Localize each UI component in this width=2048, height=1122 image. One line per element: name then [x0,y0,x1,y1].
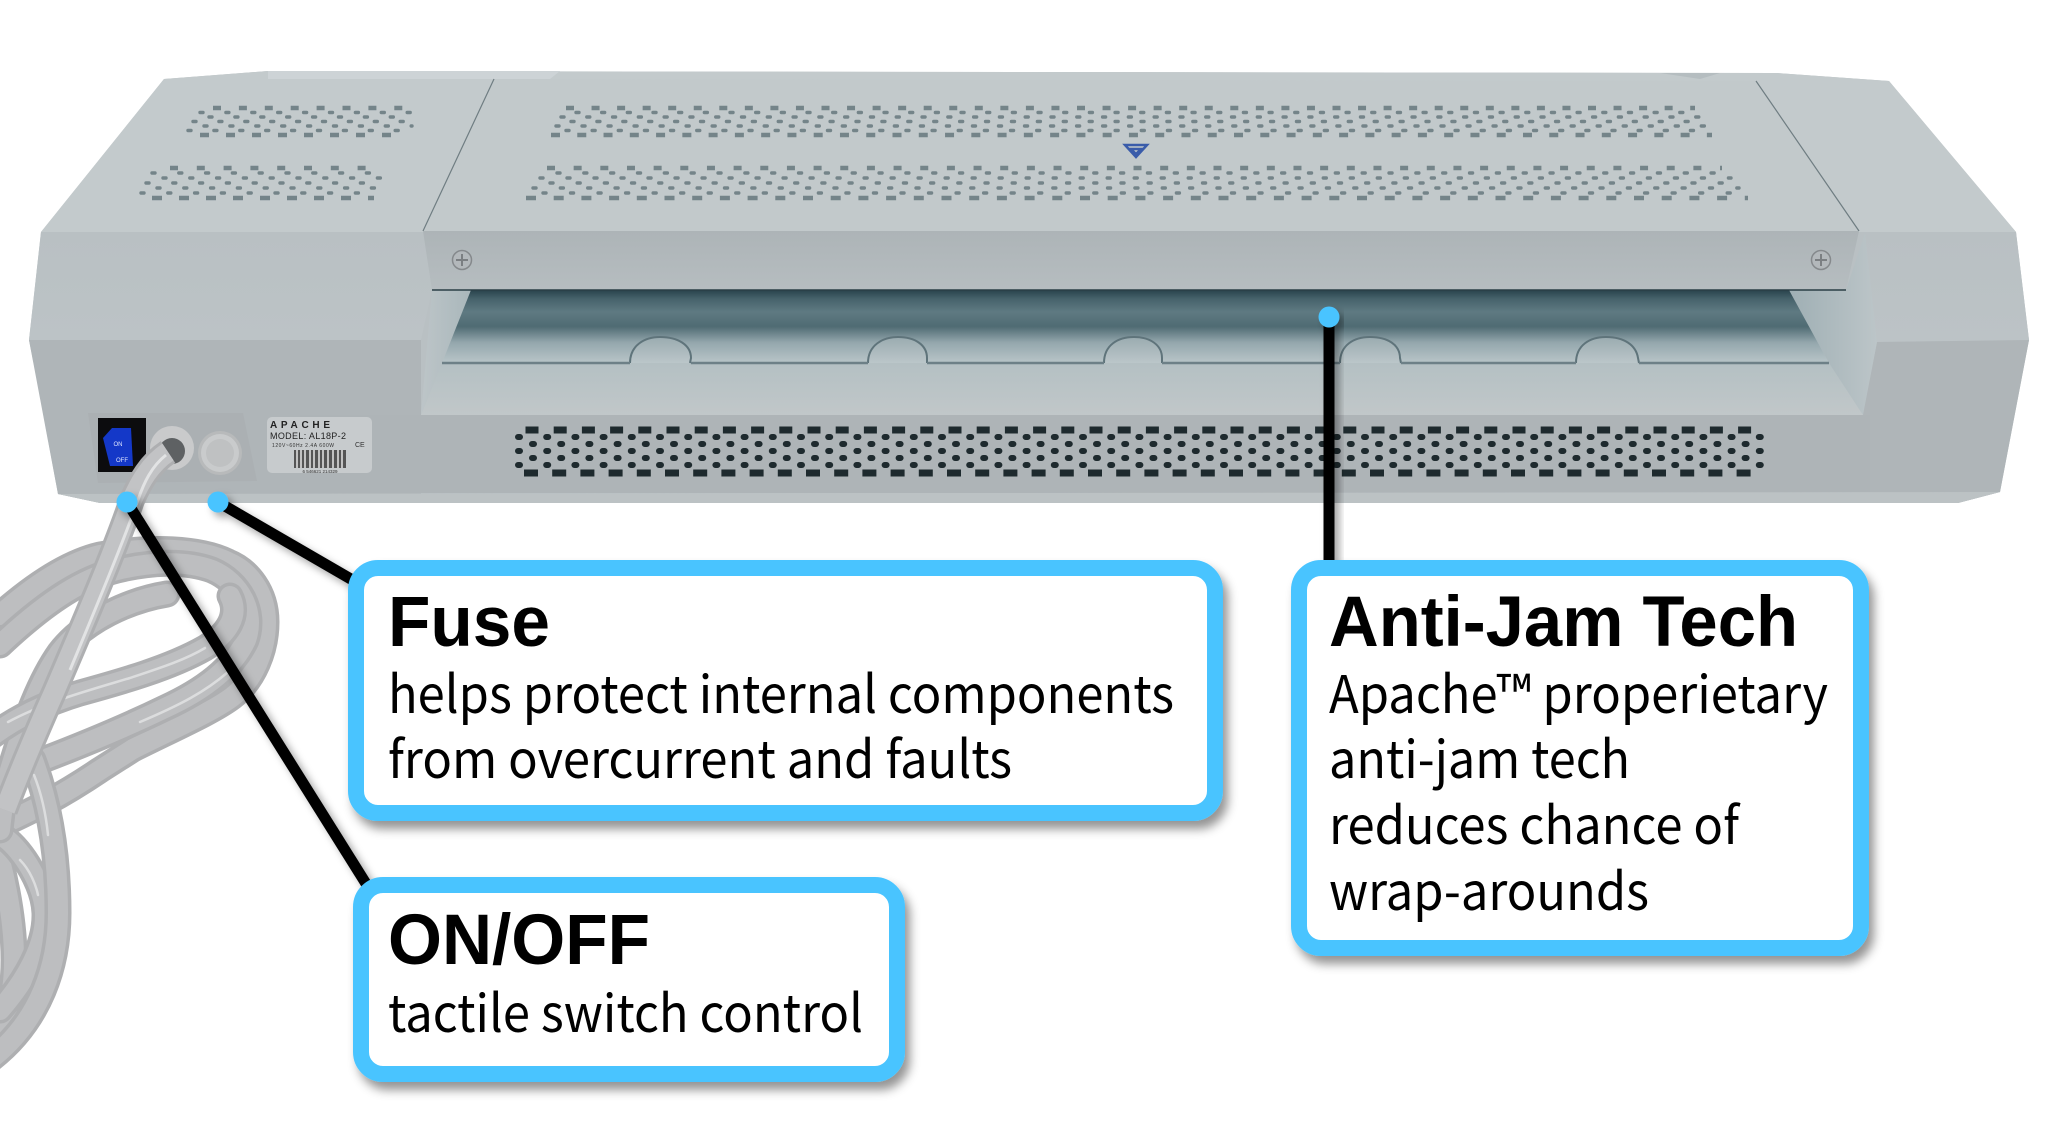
anti-jam description: anti-jam tech [1329,718,1630,793]
center vent upper [551,108,1712,135]
product label: MODEL: AL18P-2 [270,431,346,441]
screw left [452,250,472,270]
feed cover front [423,231,1859,290]
product label [267,417,372,474]
fuse description: from overcurrent and faults [388,718,1012,793]
slot wall left [421,290,471,415]
leader line: anti-jam [1318,306,1340,566]
fuse description: helps protect internal components [388,653,1174,728]
fuse description [388,653,1174,793]
product label: APACHE [270,420,330,431]
control panel recess [88,413,257,483]
body silhouette [29,71,2029,503]
fuse button [198,431,242,475]
anti-jam heading: Anti-Jam Tech [1329,583,1798,662]
front lower band [300,415,1870,493]
left upper front facet [29,232,432,340]
front vent [518,430,1766,473]
fuse heading: Fuse [388,583,550,662]
top surface [41,71,2016,232]
anti-jam description: wrap-arounds [1329,850,1649,925]
laminator body [5,71,2029,810]
product label: 120V~60Hz 2.4A 600W [272,443,334,449]
on/off heading: ON/OFF [388,901,650,980]
leader line: fuse [208,492,356,582]
callout: on/off [361,885,897,1074]
slot wall right [1789,233,1877,415]
screw right [1812,250,1830,270]
leader line: on/off [116,492,370,890]
tray surface [421,363,1863,415]
power switch: OFF [116,458,128,464]
anti-jam description [1329,653,1828,925]
left lower front facet [29,340,421,503]
anti-jam description: reduces chance of [1329,784,1741,859]
callout: fuse [356,568,1215,813]
right lower front facet [1863,340,2029,503]
feed cover top [423,79,1859,231]
power cable coil [0,550,266,1058]
paper guide notches [630,337,1639,363]
power switch [98,418,146,472]
logo triangle [1125,145,1147,157]
left vent lower [141,168,386,198]
power switch: ON [114,442,122,448]
cable grommet and main cable [5,426,194,810]
product label: CE [355,442,365,449]
anti-jam description: Apache™ properietary [1329,653,1828,728]
right upper front facet [1859,232,2029,342]
callout: anti-jam tech [1299,568,1861,948]
center vent lower [526,168,1748,198]
product label: 6 546621 214329 [302,469,338,474]
left vent upper [188,108,418,135]
on/off description: tactile switch control [388,972,863,1047]
feed slot [442,290,1829,363]
